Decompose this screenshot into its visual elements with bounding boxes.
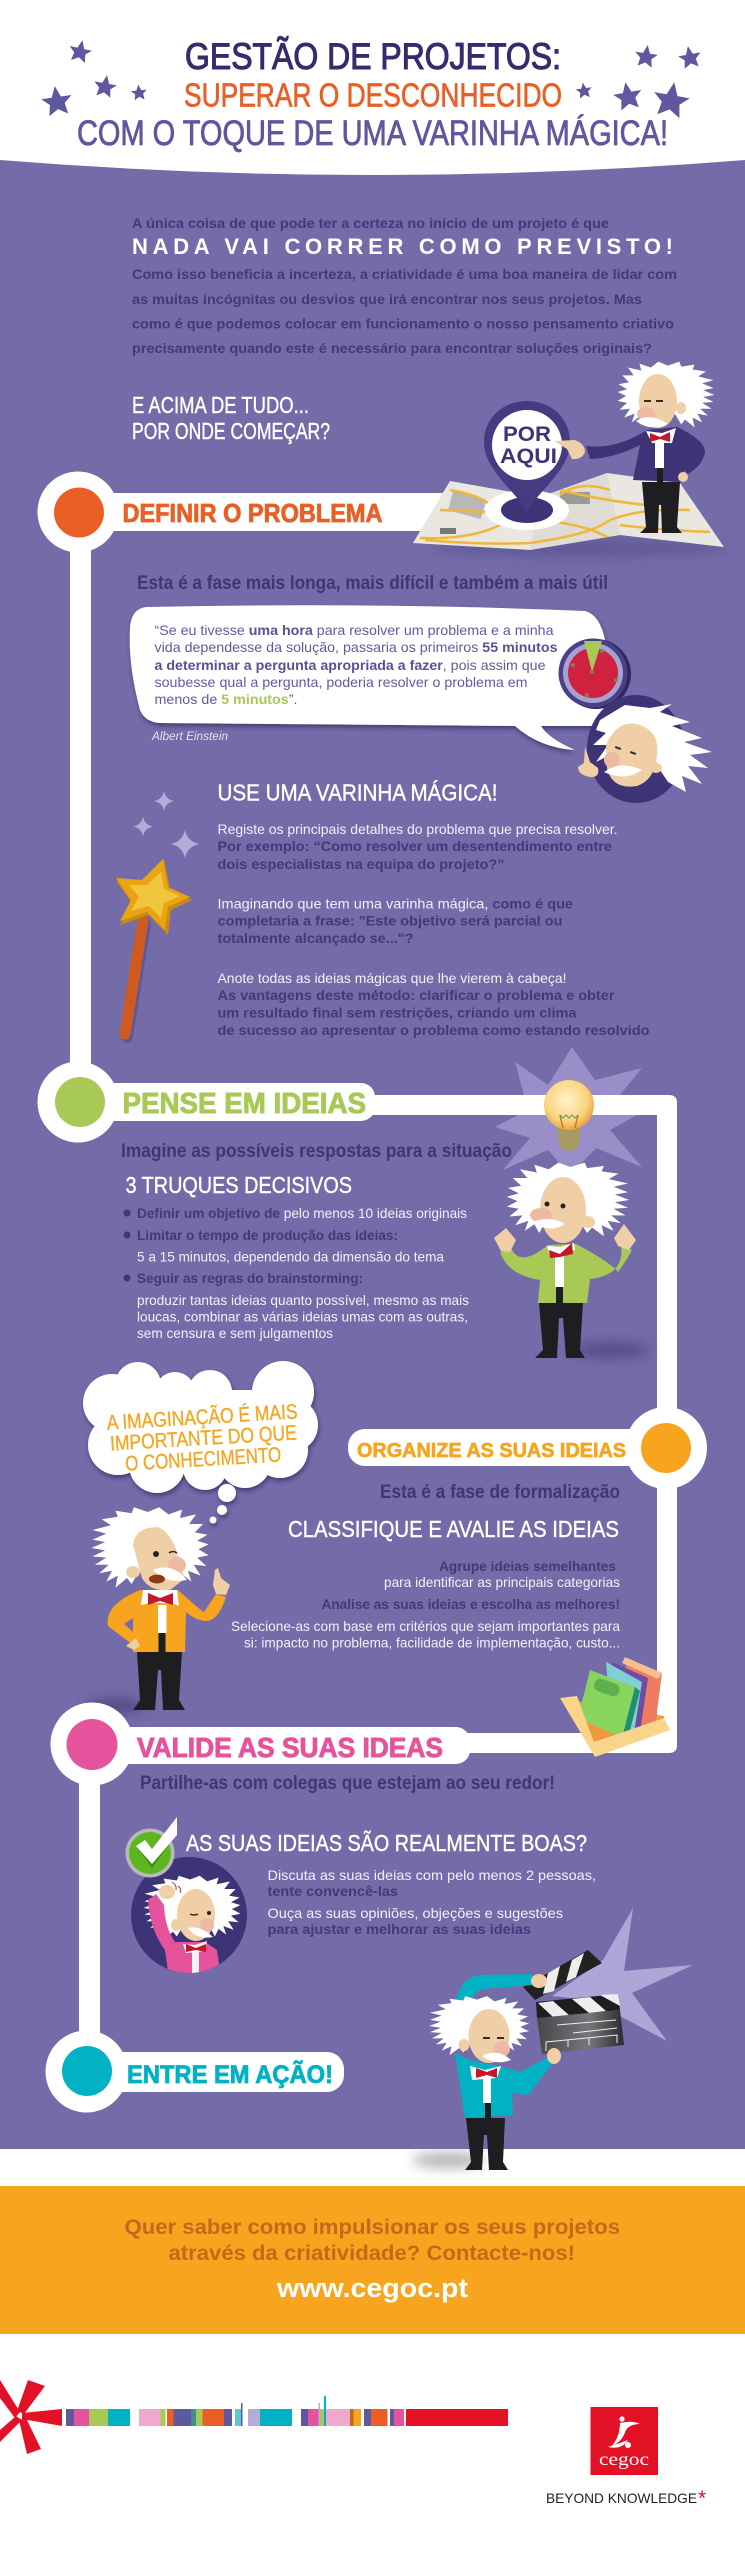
body text bbox=[231, 1558, 620, 1650]
red asterisk bbox=[0, 2380, 62, 2454]
intro text block bbox=[132, 215, 677, 444]
pin text: AQUI bbox=[500, 445, 557, 468]
paragraph 2: totalmente alcançado se..."? bbox=[218, 930, 414, 946]
subheading: Esta é a fase de formalização bbox=[380, 1482, 620, 1503]
intro first line: A única coisa de que pode ter a certeza no início de um projeto é que bbox=[132, 215, 609, 231]
intro paragraph bbox=[132, 266, 677, 356]
stage 1 bar bbox=[78, 493, 445, 531]
list text: Definir um objetivo de pelo menos 10 ideias originais bbox=[137, 1205, 467, 1221]
paragraph 2: completaria a frase: "Este objetivo será parcial ou bbox=[218, 912, 562, 928]
thought dots bbox=[210, 1484, 236, 1524]
logo mark bbox=[608, 2416, 640, 2448]
sparkles bbox=[133, 791, 200, 858]
quote text: a determinar a pergunta apropriada a fazer , pois assim que bbox=[154, 657, 546, 673]
heading: CLASSIFIQUE E AVALIE AS IDEIAS bbox=[288, 1516, 619, 1542]
cloud text: IMPORTANTE DO QUE bbox=[109, 1422, 297, 1456]
paragraph 2: Imaginando que tem uma varinha mágica, como é que bbox=[218, 896, 573, 912]
list text: sem censura e sem julgamentos bbox=[137, 1325, 333, 1341]
stage 1: definir o problema bbox=[38, 472, 445, 552]
intro paragraph: Como isso beneficia a incerteza, a criatividade é uma boa maneira de lidar com bbox=[132, 266, 677, 282]
tagline: BEYOND KNOWLEDGE bbox=[546, 2490, 697, 2506]
subheading: imagine: Imagine as possíveis respostas para a situação bbox=[121, 1141, 512, 1162]
list text: Seguir as regras do brainstorming: bbox=[137, 1270, 363, 1286]
question: E ACIMA DE TUDO... bbox=[132, 392, 309, 418]
paragraph 2 bbox=[218, 896, 573, 946]
title line 2: SUPERAR O DESCONHECIDO bbox=[184, 76, 562, 114]
intro headline: NADA VAI CORRER COMO PREVISTO! bbox=[132, 234, 673, 259]
stage 3 bar bbox=[348, 1429, 648, 1466]
star behind clapperboard bbox=[552, 1908, 693, 2041]
stage 3 label: ORGANIZE AS SUAS IDEIAS bbox=[357, 1440, 626, 1462]
intro paragraph: como é que podemos colocar em funcionamento o nosso pensamento criativo bbox=[132, 316, 674, 332]
stage 2 label: PENSE EM IDEIAS bbox=[122, 1088, 366, 1120]
intro paragraph: as muitas incógnitas ou desvios que irá encontrar nos seus projetos. Mas bbox=[132, 291, 642, 307]
quote text: soubesse qual a pergunta, poderia resolver o problema em bbox=[154, 674, 528, 690]
icon: books in tray bbox=[560, 1657, 670, 1757]
quote text bbox=[154, 622, 558, 707]
list text: produzir tantas ideias quanto possível, mesmo as mais bbox=[137, 1292, 469, 1308]
paragraph 1 bbox=[218, 821, 618, 872]
question: POR ONDE COMEÇAR? bbox=[132, 418, 330, 444]
subheading: fase mais longa: Esta é a fase mais longa, mais difícil e também a mais útil bbox=[137, 573, 608, 594]
stage 5 node bbox=[46, 2030, 128, 2112]
stage 1 node bbox=[38, 472, 118, 552]
section: 3 truques decisivos bbox=[124, 1172, 469, 1341]
list text: 5 a 15 minutos, dependendo da dimensão do tema bbox=[137, 1248, 444, 1264]
body text: para ajustar e melhorar as suas ideias bbox=[268, 1921, 531, 1937]
quote text: “Se eu tivesse uma hora para resolver um problema e a minha bbox=[154, 622, 554, 638]
list text: loucas, combinar as várias ideias umas com as outras, bbox=[137, 1308, 468, 1324]
location pin bbox=[484, 401, 570, 530]
stage 3: organize as suas ideias bbox=[348, 1407, 707, 1489]
speech bubble with Einstein quote bbox=[130, 605, 608, 750]
intro paragraph: precisamente quando este é necessário para encontrar soluções originais? bbox=[132, 340, 652, 356]
body text: Agrupe ideias semelhantes bbox=[439, 1558, 616, 1574]
background: purple panel bbox=[0, 160, 745, 2149]
cta text: através da criatividade? Contacte-nos! bbox=[168, 2242, 575, 2265]
cloud text: O CONHECIMENTO bbox=[125, 1443, 282, 1476]
bubble shape bbox=[130, 605, 608, 750]
light bulb bbox=[544, 1080, 594, 1151]
stage 4 bar bbox=[92, 1727, 470, 1764]
quote attribution: Albert Einstein bbox=[151, 729, 228, 743]
call to action band bbox=[0, 2186, 745, 2334]
character: Einstein hands up, green jacket bbox=[494, 1163, 650, 1358]
map bbox=[413, 473, 730, 556]
character: Einstein finger up, orange jacket bbox=[85, 1507, 230, 1713]
character: Einstein holding clapperboard, teal jacket bbox=[412, 1974, 561, 2170]
body text: Ouça as suas opiniões, objeções e sugestões bbox=[268, 1905, 563, 1921]
decorative stars bbox=[40, 38, 703, 119]
logo word: cegoc bbox=[599, 2449, 649, 2469]
website: www.cegoc.pt bbox=[276, 2273, 468, 2303]
icon: clapperboard bbox=[523, 1950, 624, 2054]
stage 4 node bbox=[50, 1702, 134, 1786]
stage 2 node bbox=[38, 1062, 118, 1142]
timeline path bbox=[70, 512, 677, 2072]
heading: 3 TRUQUES DECISIVOS bbox=[126, 1172, 352, 1198]
quote text: menos de 5 minutos”. bbox=[154, 691, 298, 707]
bullets bbox=[124, 1210, 130, 1282]
body text bbox=[268, 1867, 596, 1937]
body text: Selecione-as com base em critérios que sejam importantes para bbox=[231, 1618, 620, 1634]
section: use uma varinha mágica bbox=[218, 780, 650, 1038]
cloud shape bbox=[83, 1361, 318, 1493]
stage 2: pense em ideias bbox=[38, 1062, 375, 1142]
stage 5 label: ENTRE EM AÇÃO! bbox=[127, 2059, 333, 2089]
paragraph 3: As vantagens deste método: clarificar o problema e obter bbox=[218, 987, 615, 1003]
subheading: partilhe: Partilhe-as com colegas que estejam ao seu redor! bbox=[140, 1773, 555, 1794]
list text: Limitar o tempo de produção das ideias: bbox=[137, 1227, 398, 1243]
stage 4 label: VALIDE AS SUAS IDEAS bbox=[137, 1732, 443, 1763]
stage 5: entre em ação bbox=[46, 2030, 344, 2112]
stage 4: valide as suas ideas bbox=[50, 1702, 470, 1786]
paragraph 1: Registe os principais detalhes do problema que precisa resolver. bbox=[218, 821, 618, 837]
colour segments bbox=[66, 2396, 508, 2426]
body text: Discuta as suas ideias com pelo menos 2 pessoas, bbox=[268, 1867, 596, 1883]
cta text bbox=[124, 2216, 620, 2265]
heading: USE UMA VARINHA MÁGICA! bbox=[218, 780, 498, 806]
cta text: Quer saber como impulsionar os seus projetos bbox=[124, 2216, 620, 2239]
cloud text: A IMAGINAÇÃO É MAIS bbox=[106, 1399, 298, 1435]
thought cloud bbox=[83, 1361, 318, 1524]
footer colour bar with asterisk bbox=[0, 2380, 508, 2454]
icon: green check bbox=[126, 1817, 177, 1878]
list text bbox=[137, 1205, 469, 1341]
paragraph 3: Anote todas as ideias mágicas que lhe vierem à cabeça! bbox=[218, 970, 566, 986]
stage 1 label: DEFINIR O PROBLEMA bbox=[122, 498, 383, 528]
character: Einstein head in oval bbox=[578, 695, 712, 803]
section: classifique e avalie bbox=[231, 1482, 620, 1650]
character: Einstein scratching head in oval, pink jacket bbox=[131, 1857, 247, 1985]
stage 3 node bbox=[625, 1407, 707, 1489]
quote text: vida dependesse da solução, passaria os primeiros 55 minutos bbox=[154, 639, 558, 655]
question bbox=[132, 392, 330, 444]
section: as suas ideias bbox=[186, 1830, 596, 1937]
stage 5 bar bbox=[87, 2052, 344, 2092]
character: Einstein pointing, navy jacket bbox=[555, 362, 714, 533]
cloud text bbox=[106, 1399, 301, 1477]
lightbulb burst bbox=[495, 1047, 642, 1175]
body text: si: impacto no problema, facilidade de implementação, custo... bbox=[244, 1634, 620, 1650]
title line 1: GESTÃO DE PROJETOS: bbox=[185, 36, 561, 77]
paragraph 1: dois especialistas na equipa do projeto?” bbox=[218, 856, 504, 872]
tagline bbox=[546, 2487, 706, 2510]
paragraph 3: um resultado final sem restrições, criando um clima bbox=[218, 1004, 577, 1020]
title bbox=[77, 36, 668, 153]
body text: Analise as suas ideias e escolha as melhores! bbox=[322, 1596, 620, 1612]
stage 2 bar bbox=[78, 1083, 375, 1121]
pin text bbox=[500, 423, 557, 468]
paragraph 3 bbox=[218, 970, 650, 1038]
paragraph 3: de sucesso ao apresentar o problema como estando resolvido bbox=[218, 1022, 650, 1038]
body text: tente convencê-las bbox=[268, 1883, 398, 1899]
body text: para identificar as principais categorias bbox=[384, 1574, 620, 1590]
pin text: POR bbox=[503, 423, 551, 446]
cegoc logo bbox=[590, 2407, 658, 2475]
tagline: * bbox=[698, 2487, 706, 2510]
stopwatch icon bbox=[558, 638, 631, 709]
magic wand bbox=[116, 859, 192, 1037]
paragraph 1: Por exemplo: “Como resolver um desentendimento entre bbox=[218, 838, 612, 854]
heading: AS SUAS IDEIAS SÃO REALMENTE BOAS? bbox=[186, 1830, 587, 1856]
